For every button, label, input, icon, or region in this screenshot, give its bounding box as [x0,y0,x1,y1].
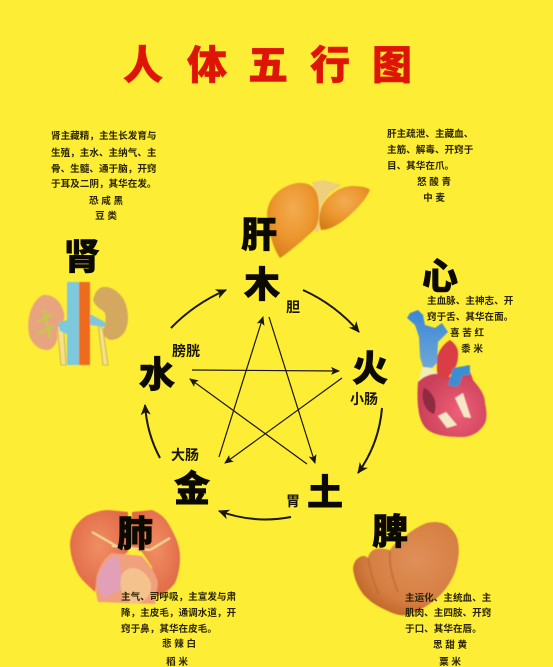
text block: heart: 主血脉、主神志、开 [427,295,514,307]
title [123,44,412,88]
text block: kidney: 肾主藏精，主生长发育与 [51,130,157,142]
title: 图 [372,44,412,88]
text block: liver: 主筋、解毒、开窍于 [387,144,474,156]
title: 体 [187,44,227,88]
text block: lungs: 主气、司呼吸，主宣发与肃 [121,591,237,603]
text block: spleen: 于口、其华在唇。 [405,623,482,635]
text block: kidney: 恐 咸 黑 [89,195,123,207]
organ: spleen [353,522,459,615]
title: 人 [123,44,163,88]
label: 小肠: 小肠 [350,391,378,407]
arrows: outer cycle [145,290,382,519]
text block: kidney: 骨、生髓、通于脑，开窍 [51,163,157,175]
text block: heart: 黍 米 [461,343,483,355]
label: 金: 金 [174,468,210,509]
text block: kidney: 生殖，主水、主纳气、主 [51,147,157,159]
organ: liver [267,180,370,258]
text block: heart [427,295,514,355]
label: 膀胱: 膀胱 [172,343,200,359]
label: 肾: 肾 [64,236,100,277]
text block: lungs: 悲 辣 白 [162,638,196,650]
text block: lungs: 降，主皮毛，通调水道，开 [121,607,237,619]
text block: liver: 目、其华在爪。 [387,160,454,172]
label: 胆: 胆 [286,299,300,315]
text block: lungs: 窍于鼻，其华在皮毛。 [121,623,217,635]
label: 大肠: 大肠 [171,447,199,463]
text block: spleen: 主运化、主统血、主 [405,592,492,604]
text block: heart: 窍于舌、其华在面。 [427,311,513,323]
label: 心: 心 [422,256,458,297]
text block: spleen: 思 甜 黄 [433,639,467,651]
text block: kidney: 豆 类 [95,210,117,222]
organ: lungs [70,510,180,604]
text block: lungs [121,591,237,667]
text block: heart: 喜 苦 红 [450,327,484,339]
text block: spleen [405,592,492,667]
text block: liver [387,128,474,204]
text block: spleen: 肌肉、主四肢、开窍 [405,607,491,619]
label: 脾: 脾 [372,511,408,552]
label: 土: 土 [307,472,343,513]
label: 木: 木 [244,264,280,305]
arrows: pentagram [190,317,342,464]
label: 胃: 胃 [286,493,300,509]
label: 肺: 肺 [117,513,153,554]
organ: heart [407,310,486,437]
text block: kidney [51,130,157,222]
label: 水: 水 [139,354,175,395]
organ: kidney [28,282,128,365]
title: 五 [248,44,288,88]
text block: kidney: 于耳及二阴，其华在发。 [51,178,157,190]
label: 火: 火 [352,348,388,389]
text block: liver: 肝主疏泄、主藏血、 [387,128,473,140]
text block: liver: 怒 酸 青 [417,176,451,188]
text block: liver: 中 麦 [423,192,445,204]
label: 肝: 肝 [241,214,277,255]
title: 行 [310,44,350,88]
